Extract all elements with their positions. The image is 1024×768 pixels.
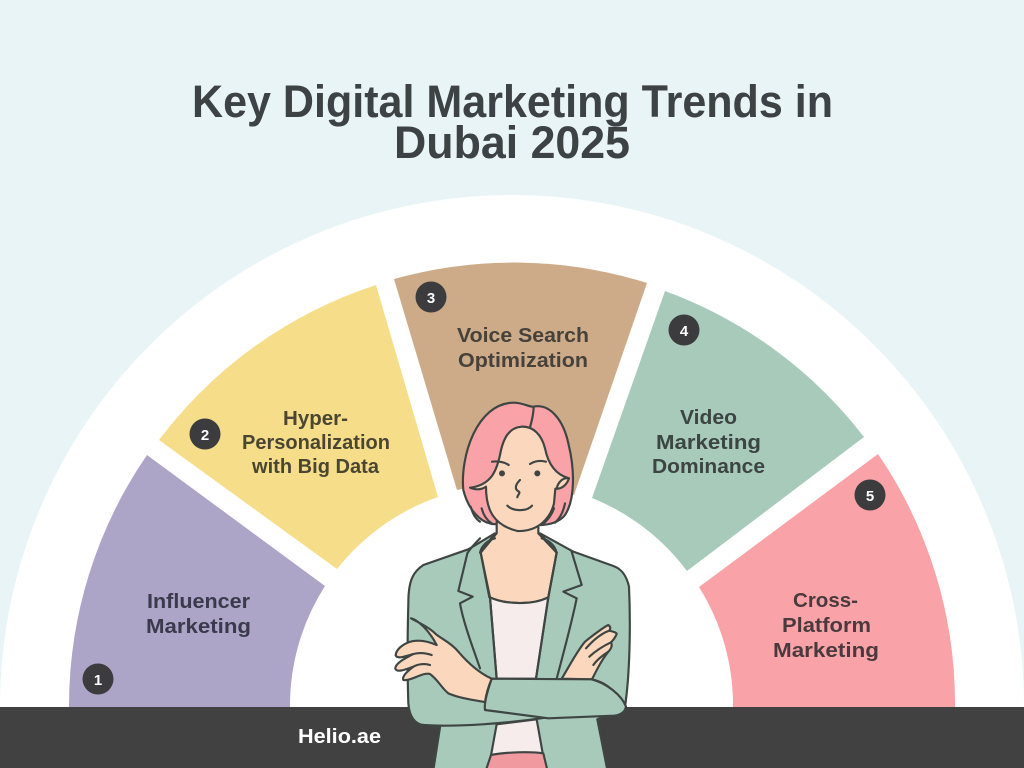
segment 4 label: Dominance xyxy=(652,455,765,478)
white semicircle backdrop xyxy=(0,195,1024,707)
segment 5 label: Marketing xyxy=(773,639,879,662)
segment 2 label xyxy=(242,407,390,478)
segment 2 label: with Big Data xyxy=(251,455,380,478)
segment 4 label: Video xyxy=(680,406,737,429)
nose and mouth xyxy=(507,480,532,510)
right forearm sleeve xyxy=(485,679,626,718)
face xyxy=(470,427,569,531)
segment 5 shape xyxy=(699,454,955,707)
title xyxy=(192,76,833,168)
segment 5 label: Cross- xyxy=(793,589,858,612)
segment 3 shape xyxy=(394,263,647,495)
number badge 1 xyxy=(82,664,114,694)
panel: 2 hyper-personalization xyxy=(159,285,438,569)
segment 1 shape xyxy=(69,455,325,707)
hair parting and strands xyxy=(471,407,568,525)
number badge 4 xyxy=(668,314,700,346)
number badge 5 xyxy=(854,480,886,510)
right sleeve fold xyxy=(592,679,612,689)
panel: 3 voice search optimization xyxy=(394,263,647,495)
panel: 4 video marketing dominance xyxy=(592,291,864,571)
segment 4 shape xyxy=(592,291,864,571)
hair xyxy=(463,403,573,525)
segment 4 label: Marketing xyxy=(656,431,761,454)
number badge 2 xyxy=(190,418,220,450)
number badge 3 xyxy=(416,282,446,312)
segment 5 label xyxy=(773,589,879,662)
left hand over sleeve xyxy=(395,618,492,702)
illustration: woman with crossed arms xyxy=(395,403,630,768)
jacket body xyxy=(408,533,630,768)
segment 2 label: Personalization xyxy=(242,431,390,454)
left hand finger lines xyxy=(413,653,432,667)
number badge 5: 5 xyxy=(866,488,874,505)
right hand finger lines xyxy=(586,631,611,665)
footer brand text: Helio.ae xyxy=(298,726,381,748)
segment 3 label xyxy=(457,324,589,372)
segment 1 label: Marketing xyxy=(146,615,251,638)
title: Dubai 2025 xyxy=(394,117,630,168)
segment 2 shape xyxy=(159,285,438,569)
panel: 1 influencer marketing xyxy=(69,455,325,707)
segment 1 label: Influencer xyxy=(147,590,250,613)
segment 1 label xyxy=(146,590,251,638)
number badge 1: 1 xyxy=(94,672,102,689)
panel: 5 cross-platform marketing xyxy=(699,454,955,707)
neck and chest xyxy=(481,522,557,603)
footer bar xyxy=(0,707,1024,768)
number badge 4: 4 xyxy=(680,323,689,340)
title: Key Digital Marketing Trends in xyxy=(192,76,833,127)
white top xyxy=(488,597,548,768)
segment 4 label xyxy=(652,406,765,478)
jacket lapels xyxy=(458,538,582,679)
segment 2 label: Hyper- xyxy=(283,407,348,430)
pink skirt xyxy=(486,752,547,768)
eyes and eyebrows xyxy=(492,461,546,476)
segment 3 label: Voice Search xyxy=(457,324,589,347)
segment 5 label: Platform xyxy=(782,614,871,637)
left sleeve lower edge xyxy=(423,717,548,726)
number badge 3: 3 xyxy=(427,290,435,307)
segment 3 label: Optimization xyxy=(458,349,588,372)
number badge 2: 2 xyxy=(201,427,209,444)
right hand xyxy=(562,625,617,679)
